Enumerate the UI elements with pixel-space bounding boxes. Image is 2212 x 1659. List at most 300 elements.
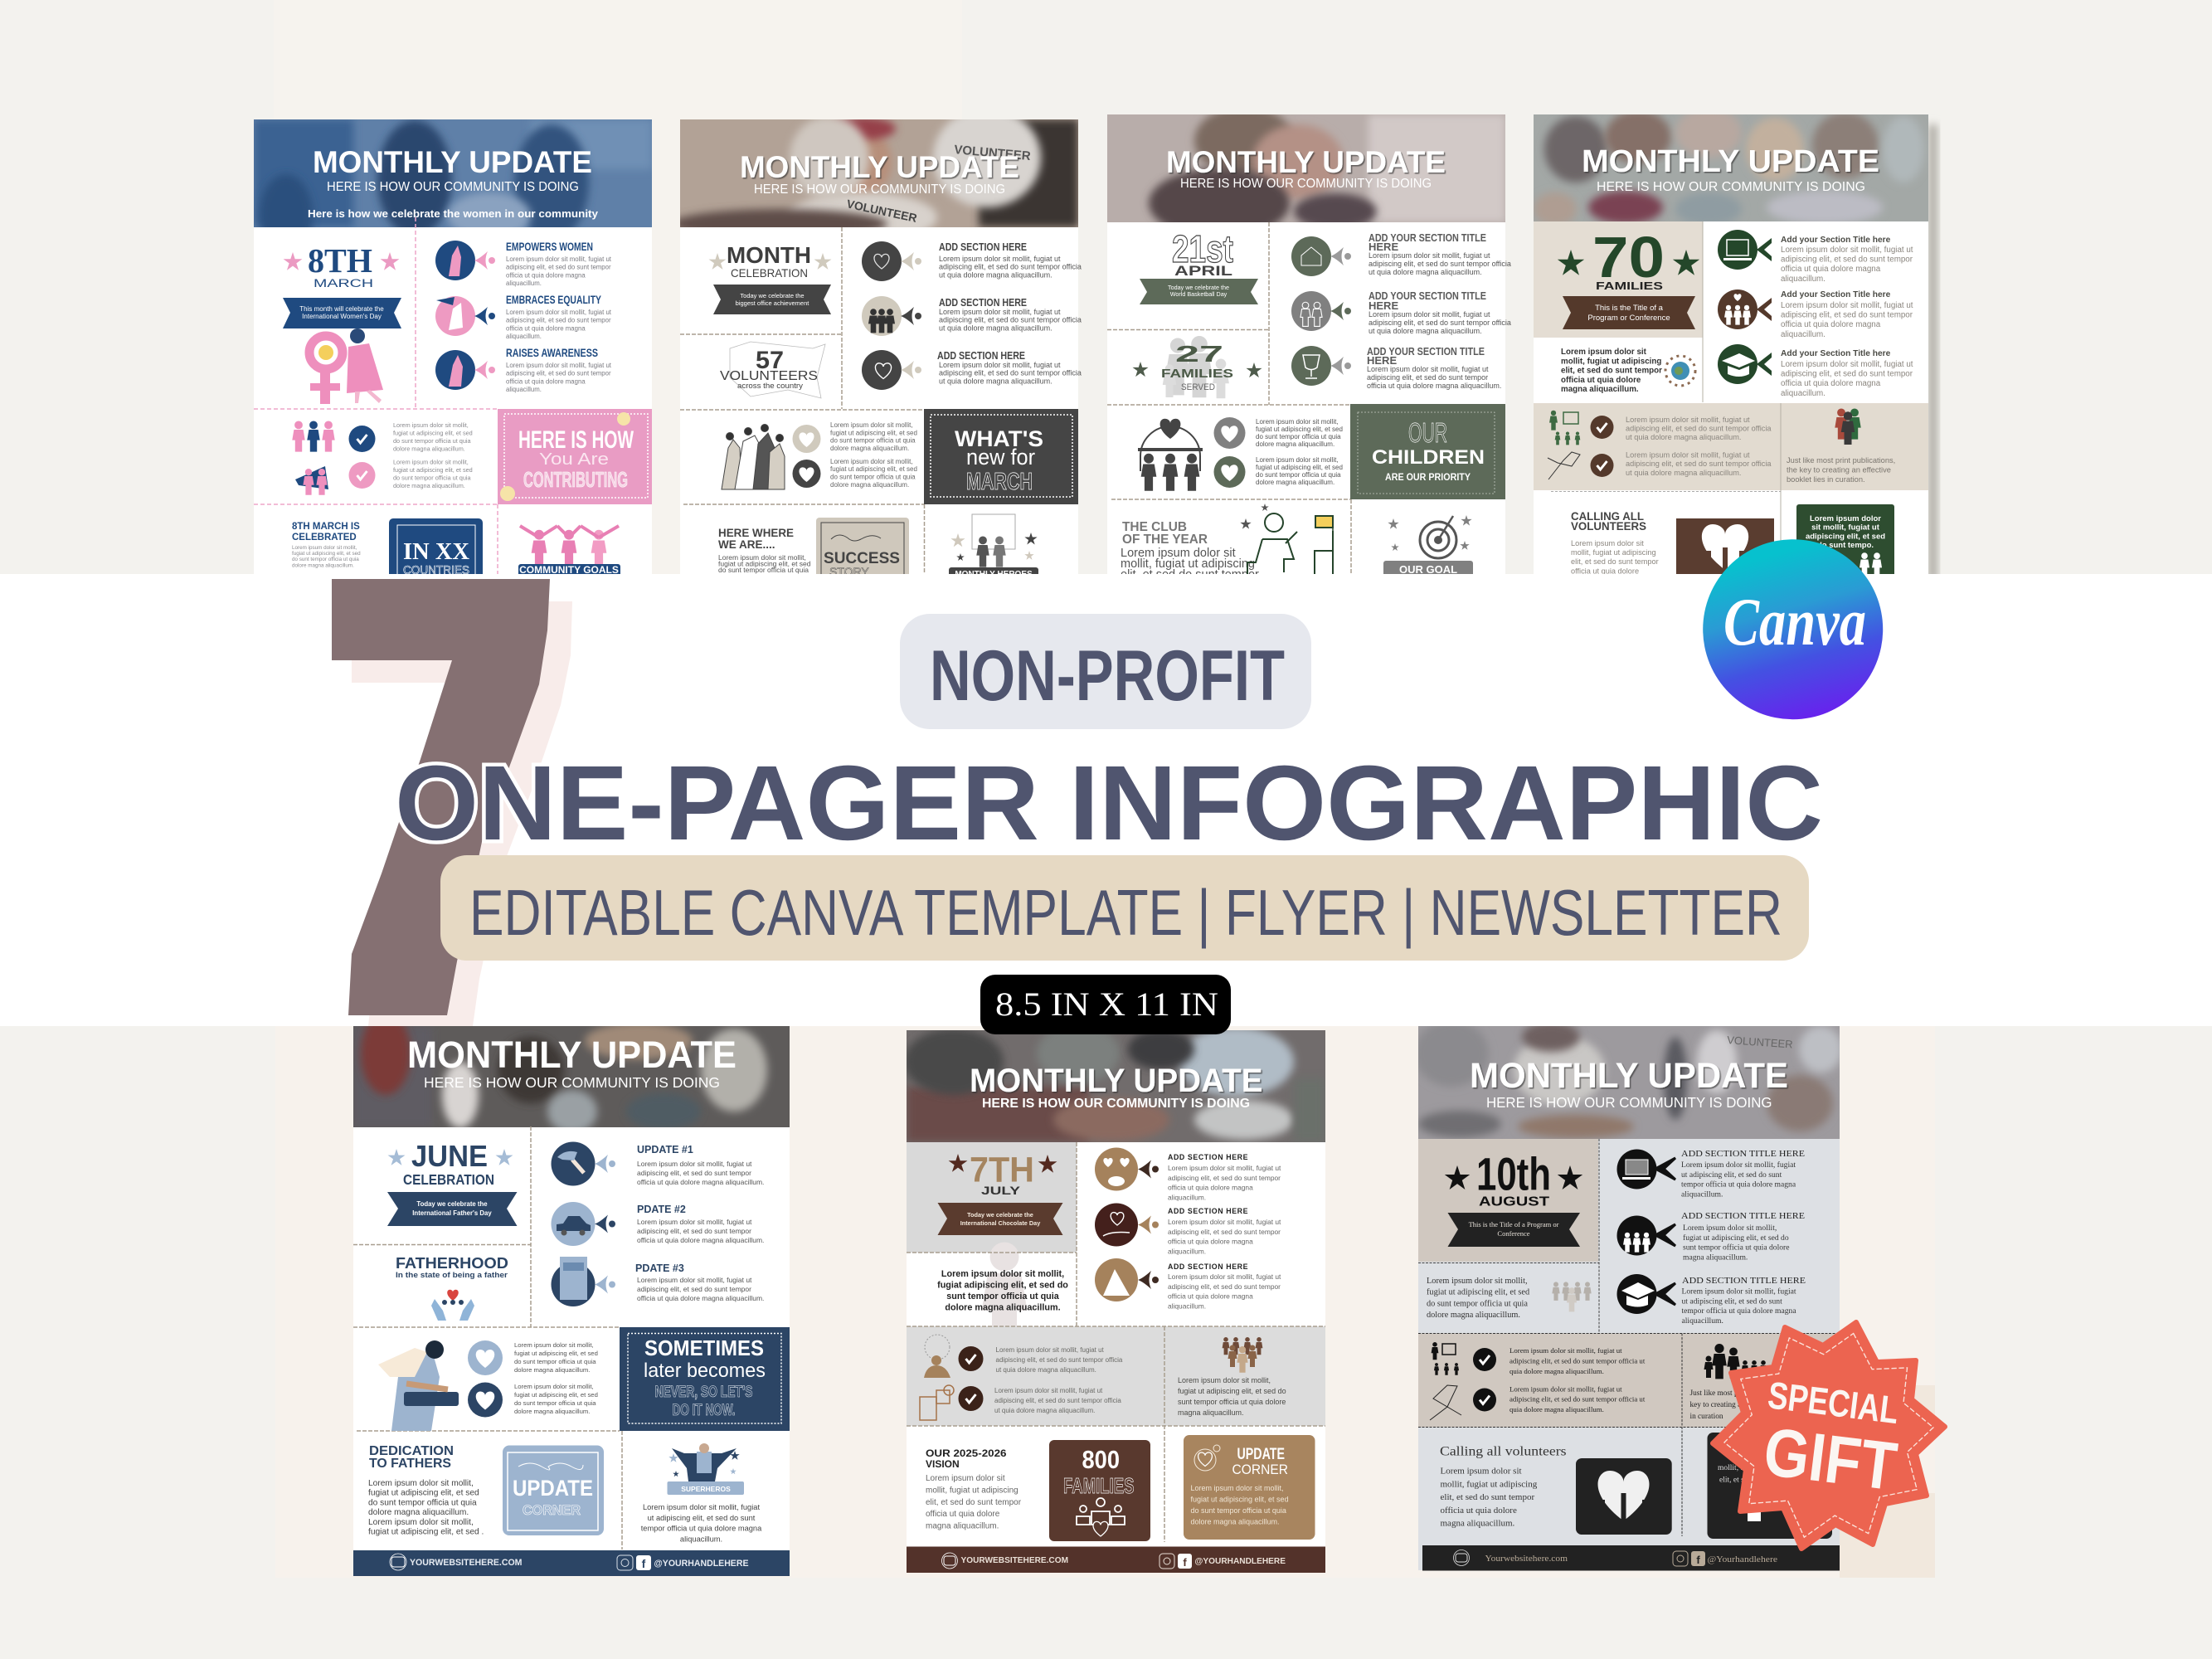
update 3: officia ut quia dolore magna aliquacillum.	[637, 1294, 764, 1302]
text block: fugiat ut adipiscing elit, et sed	[1427, 1288, 1530, 1297]
box: update corner: do sunt tempor officia ut quia	[1191, 1506, 1286, 1515]
section 3: adipiscing elit, et sed do sunt tempor	[1168, 1282, 1281, 1291]
illustration: superheroes: SUPERHEROS	[681, 1485, 731, 1493]
text block: dolore magna aliquacillum.	[1427, 1311, 1520, 1320]
fatherhood: FATHERHOOD	[396, 1255, 508, 1272]
body text: adipiscing elit, et sed do sunt tempor officia	[1626, 425, 1772, 433]
section 1: aliquacillum.	[1168, 1193, 1206, 1201]
callout: in xx countries: IN XX	[403, 539, 469, 565]
header photo	[1534, 108, 1928, 226]
dividers	[907, 1142, 1325, 1542]
bold text: dolore magna aliquacillum.	[945, 1302, 1061, 1312]
section: celebrated: Lorem ipsum dolor sit mollit,	[292, 545, 357, 551]
body text: Lorem ipsum dolor sit mollit,	[1256, 418, 1339, 426]
text: magna aliquacillum.	[1178, 1408, 1244, 1417]
text block: Lorem ipsum dolor sit mollit,	[1427, 1277, 1528, 1286]
icon: caring hands	[431, 1290, 474, 1321]
text: Lorem ipsum dolor sit mollit, fugiat	[643, 1503, 760, 1511]
grey box: date: 7TH	[970, 1150, 1034, 1190]
box: hands heart	[1676, 518, 1774, 585]
section: club of the year: elit, et sed do sunt tempor	[1121, 568, 1259, 581]
section 2: aliquacillum.	[1168, 1247, 1206, 1255]
section: dedication: Lorem ipsum dolor sit mollit,	[368, 1479, 474, 1488]
icon: crowd	[1223, 1337, 1262, 1373]
icon 3	[1718, 344, 1772, 384]
ribbon: Today we celebrate the	[967, 1211, 1033, 1219]
box: green callout	[1796, 504, 1894, 584]
section 1: HERE	[1369, 241, 1398, 253]
section 3: Lorem ipsum dolor sit mollit, fugiat ut	[1781, 360, 1913, 369]
icon 3	[1291, 346, 1351, 386]
ribbon: Today we celebrate the	[1168, 284, 1229, 291]
section: raises awareness	[506, 346, 612, 393]
section: empowers women: aliquacillum.	[506, 280, 542, 287]
body text: do sunt tempor officia ut quia	[393, 437, 472, 445]
update 1: adipiscing elit, et sed do sunt tempor	[637, 1169, 751, 1177]
check badges	[348, 426, 375, 489]
callout: sometimes	[620, 1327, 790, 1431]
section: dedication: fugiat ut adipiscing elit, et sed	[368, 1489, 479, 1498]
body text: fugiat ut adipiscing elit, et sed	[830, 465, 917, 473]
section: celebrated: fugiat ut adipiscing elit, et sed	[292, 551, 361, 557]
panel: brown chocolate day newsletter	[904, 1024, 1325, 1573]
pill: non-profit	[900, 614, 1311, 729]
icon 2	[1617, 1216, 1675, 1256]
dashed line	[1551, 491, 1781, 493]
body text: Lorem ipsum dolor sit mollit,	[393, 458, 469, 466]
section 3: adipiscing elit, et sed do sunt tempor	[1781, 370, 1913, 379]
section 1: adipiscing elit, et sed do sunt tempor officia	[939, 263, 1082, 271]
section 2: adipiscing elit, et sed do sunt tempor officia	[1369, 319, 1511, 327]
panel: monochrome volunteer newsletter	[672, 108, 1082, 584]
body text: quia dolore magna aliquacillum.	[1510, 1405, 1604, 1413]
illustration: cheering group	[1835, 408, 1861, 445]
date: month celebration	[709, 242, 831, 280]
callout: our children: OUR	[1408, 417, 1447, 448]
section 3	[1682, 1277, 1806, 1326]
canva logo: Canva	[1723, 584, 1866, 659]
section 3: adipiscing elit, et sed do sunt tempor officia	[939, 369, 1082, 377]
fatherhood: In the state of being a father	[396, 1271, 508, 1279]
date: 8TH March: 8TH	[308, 241, 372, 280]
section 2: Lorem ipsum dolor sit mollit, fugiat ut	[1781, 301, 1913, 310]
footer	[353, 1550, 790, 1576]
badge: special gift: GIFT	[1760, 1414, 1901, 1505]
ribbon: World Basketball Day	[1170, 290, 1228, 298]
body text: dolore magna aliquacillum.	[514, 1408, 590, 1415]
section: club of the year: mollit, fugiat ut adipiscing	[1121, 557, 1255, 571]
section: calling all volunteers	[1440, 1445, 1566, 1529]
section: here where we are: WE ARE....	[718, 538, 775, 551]
box: green callout: adipiscing elit, et sed	[1806, 532, 1885, 541]
header title: MONTHLY UPDATE	[1582, 144, 1879, 179]
date: 8TH March	[284, 241, 399, 289]
update 3	[635, 1262, 764, 1302]
date: 70 families	[1534, 221, 1703, 338]
section 3	[1168, 1262, 1281, 1310]
text: the key to creating an effective	[1787, 466, 1891, 474]
section: dedication: Lorem ipsum dolor sit mollit,	[368, 1518, 474, 1527]
section: empowers women: EMPOWERS WOMEN	[506, 240, 593, 253]
section: here where we are: do sunt tempor officia ut quia	[718, 566, 809, 574]
illustration: superheroes	[667, 1443, 744, 1495]
footer: f	[1696, 1554, 1700, 1566]
text: ut adipiscing elit, et sed do sunt	[648, 1514, 756, 1522]
icon: globe	[1665, 356, 1695, 386]
section 2: aliquacillum.	[1781, 330, 1826, 339]
section: celebrated: 8TH MARCH IS	[292, 522, 360, 532]
date: 21st April: 21st	[1172, 227, 1233, 270]
panel: green children newsletter	[1107, 106, 1511, 584]
body text: fugiat ut adipiscing elit, et sed	[514, 1350, 598, 1357]
callout: update corner: UPDATE	[513, 1476, 593, 1501]
ribbon	[937, 1203, 1063, 1235]
band: middle row	[1534, 403, 1928, 574]
dividers	[680, 227, 924, 574]
check badges	[1591, 416, 1614, 477]
section: vision: OUR 2025-2026	[926, 1447, 1007, 1459]
icon 3	[862, 350, 921, 390]
section: vision: VISION	[926, 1458, 960, 1470]
bold text: sunt tempor officia ut quia	[946, 1292, 1060, 1301]
grey box: date	[907, 1142, 1077, 1253]
icon: presenter	[1549, 411, 1580, 445]
band: middle row	[1418, 1334, 1840, 1536]
update 1: UPDATE #1	[637, 1144, 693, 1155]
icon: hammer	[551, 1141, 615, 1186]
section 3: ut quia dolore magna aliquacillum.	[939, 377, 1053, 385]
section: vision: elit, et sed do sunt tempor	[926, 1498, 1022, 1507]
ribbon: This is the Title of a	[1595, 304, 1664, 313]
body text: do sunt tempor officia ut quia	[514, 1399, 596, 1407]
body text: fugiat ut adipiscing elit, et sed	[514, 1391, 598, 1399]
callout: what's new: MARCH	[966, 469, 1033, 495]
icon 2	[1291, 291, 1351, 331]
numeral 7	[332, 579, 550, 1015]
fatherhood	[396, 1255, 508, 1279]
section: empowers women: officia ut quia dolore magna	[506, 271, 586, 279]
section 2: officia ut quia dolore magna	[1168, 1238, 1253, 1246]
section: club of the year: OF THE YEAR	[1122, 533, 1208, 547]
section 2: Lorem ipsum dolor sit mollit, fugiat ut	[1369, 310, 1490, 319]
header photo	[254, 119, 652, 227]
section 3: adipiscing elit, et sed do sunt tempor	[1367, 373, 1488, 382]
section 3: ADD YOUR SECTION TITLE	[1367, 345, 1485, 358]
header photo	[1414, 1020, 1842, 1139]
callout: success story	[816, 518, 909, 584]
callout: update corner	[503, 1445, 604, 1535]
stat: 27 families: 27	[1175, 341, 1223, 367]
footer: YOURWEBSITEHERE.COM	[960, 1555, 1068, 1565]
section: embraces equality: aliquacillum.	[506, 333, 542, 340]
section 3	[937, 349, 1082, 385]
panel: fathers day newsletter	[353, 1012, 790, 1576]
section 2: ADD SECTION HERE	[939, 296, 1027, 309]
header subtitle: HERE IS HOW OUR COMMUNITY IS DOING	[327, 180, 579, 194]
body text: Lorem ipsum dolor sit mollit,	[830, 458, 913, 465]
icon: car	[551, 1202, 615, 1246]
body text: do sunt tempor officia ut quia	[1256, 471, 1341, 479]
box: update corner: UPDATE	[1237, 1446, 1285, 1463]
numeral 7 shadow	[352, 601, 572, 1026]
header title: MONTHLY UPDATE	[970, 1063, 1262, 1099]
box: hands heart	[1576, 1458, 1672, 1535]
box: update corner: fugiat ut adipiscing elit, et sed	[1191, 1495, 1289, 1503]
section 1	[1168, 1153, 1281, 1201]
bold text	[937, 1243, 1068, 1352]
stat: 57 volunteers	[720, 342, 825, 398]
header photo: VOLUNTEER	[845, 197, 918, 225]
section 1: aliquacillum.	[1681, 1190, 1723, 1199]
date: month celebration: MONTH	[727, 242, 811, 268]
section 3: Lorem ipsum dolor sit mollit, fugiat ut	[1168, 1272, 1281, 1281]
section 1: ut quia dolore magna aliquacillum.	[939, 270, 1053, 279]
section 3: aliquacillum.	[1781, 389, 1826, 398]
icon 1	[1291, 236, 1351, 276]
section: embraces equality: Lorem ipsum dolor sit mollit, fugiat ut	[506, 309, 612, 316]
section: calling all volunteers: officia ut quia dolore	[1440, 1506, 1517, 1515]
body text: Lorem ipsum dolor sit mollit,	[830, 421, 913, 429]
section: calling all volunteers: Lorem ipsum dolor sit	[1440, 1467, 1522, 1477]
grey box: date: JULY	[981, 1184, 1021, 1197]
illustration: high five group	[722, 425, 785, 489]
ribbon: Conference	[1497, 1229, 1530, 1238]
body text: ut quia dolore magna aliquacillum.	[995, 1366, 1096, 1374]
illustration: carpenter	[378, 1340, 459, 1431]
section 1: Lorem ipsum dolor sit mollit, fugiat ut	[939, 255, 1061, 263]
illustration: woman with female symbol	[309, 328, 383, 404]
body text: Lorem ipsum dolor sit mollit,	[393, 421, 469, 429]
body text: fugiat ut adipiscing elit, et sed	[1256, 464, 1343, 471]
stat: 27 families: SERVED	[1181, 382, 1215, 392]
body text: quia dolore magna aliquacillum.	[1510, 1367, 1604, 1375]
callout: here is how: HERE IS HOW	[518, 426, 634, 454]
section 2	[1369, 289, 1511, 335]
ribbon	[1448, 1213, 1580, 1247]
section 2	[1168, 1207, 1281, 1255]
header subtitle: HERE IS HOW OUR COMMUNITY IS DOING	[1180, 177, 1432, 191]
date: 70 families: 70	[1592, 225, 1665, 289]
section: club of the year	[1121, 520, 1259, 581]
section: calling all volunteers: VOLUNTEERS	[1571, 520, 1646, 533]
text: booklet lies in curation.	[1787, 475, 1865, 484]
panel: grey august newsletter	[1414, 1020, 1842, 1571]
section 1: officia ut quia dolore magna	[1168, 1184, 1253, 1192]
body text: adipiscing elit, et sed do sunt tempor officia ut	[1510, 1395, 1646, 1404]
pill: subtitle: EDITABLE CANVA TEMPLATE | FLYER | NEWSLETTER	[469, 876, 1782, 949]
section: calling all volunteers: mollit, fugiat ut adipiscing	[1571, 548, 1656, 557]
update 3: Lorem ipsum dolor sit mollit, fugiat ut	[637, 1276, 752, 1284]
section: here where we are: HERE WHERE	[718, 527, 794, 539]
date: June: JUNE	[411, 1139, 488, 1173]
header photo: VOLUNTEER	[1727, 1034, 1793, 1051]
date: 8TH March: MARCH	[314, 277, 373, 289]
text block: elit, et sed do sunt tempor	[1561, 367, 1662, 376]
date: 10th August: 10th	[1476, 1148, 1551, 1199]
update 2: Lorem ipsum dolor sit mollit, fugiat ut	[637, 1218, 752, 1226]
check badges	[1473, 1348, 1496, 1412]
section 2: ut quia dolore magna aliquacillum.	[1369, 327, 1482, 335]
section 1: ut quia dolore magna aliquacillum.	[1369, 268, 1482, 276]
icon: person with thoughts	[924, 1335, 950, 1378]
header title: MONTHLY UPDATE	[1166, 145, 1446, 179]
section: embraces equality	[506, 293, 612, 340]
section 2: fugiat ut adipiscing elit, et sed do	[1683, 1233, 1789, 1243]
callout: what's new	[924, 409, 1078, 504]
section: celebrated: CELEBRATED	[292, 533, 357, 542]
callout: success story: SUCCESS	[824, 550, 900, 567]
footer: Yourwebsitehere.com	[1485, 1554, 1568, 1564]
section: empowers women: adipiscing elit, et sed do sunt tempor	[506, 264, 611, 271]
update 1	[637, 1144, 764, 1186]
section 2	[939, 296, 1082, 332]
header subtitle: HERE IS HOW OUR COMMUNITY IS DOING	[1597, 180, 1865, 194]
section 1: ADD SECTION TITLE HERE	[1681, 1150, 1805, 1159]
text: sunt tempor officia ut quia dolore	[1178, 1398, 1286, 1406]
body text: Lorem ipsum dolor sit mollit, fugiat ut	[994, 1387, 1103, 1394]
box: update corner: Lorem ipsum dolor sit mollit,	[1191, 1484, 1284, 1492]
header tagline: Here is how we celebrate the women in our community	[308, 207, 599, 220]
date: month celebration: CELEBRATION	[731, 266, 808, 280]
header subtitle: HERE IS HOW OUR COMMUNITY IS DOING	[1486, 1094, 1772, 1111]
section 2	[1681, 1212, 1805, 1262]
paper texture top	[274, 0, 962, 574]
icon: bag	[551, 1257, 615, 1306]
icon 2	[1718, 289, 1772, 329]
body text: fugiat ut adipiscing elit, et sed	[1256, 426, 1343, 433]
icon: handshake	[1548, 452, 1580, 479]
icon: puzzle	[920, 1385, 954, 1420]
date: 70 families: FAMILIES	[1596, 280, 1663, 292]
section 3: ADD SECTION TITLE HERE	[1682, 1277, 1806, 1286]
callout: sometimes: later becomes	[644, 1360, 766, 1382]
bold text: fugiat adipiscing elit, et sed do	[937, 1281, 1068, 1291]
dividers	[254, 217, 498, 574]
header title: MONTHLY UPDATE	[313, 145, 592, 179]
callout: in xx countries: COUNTRIES	[403, 563, 469, 577]
section 1: adipiscing elit, et sed do sunt tempor	[1781, 255, 1913, 265]
text block: Lorem ipsum dolor sit	[1561, 348, 1647, 357]
callout: our children	[1350, 404, 1505, 499]
section 2	[1781, 290, 1913, 339]
section 3: aliquacillum.	[1168, 1301, 1206, 1310]
section 1: ADD YOUR SECTION TITLE	[1369, 231, 1486, 244]
section 1	[1681, 1150, 1805, 1199]
section: calling all volunteers: Calling all volunteers	[1440, 1445, 1566, 1458]
pill: size: 8.5 IN X 11 IN	[995, 985, 1218, 1023]
footer: @YOURHANDLEHERE	[654, 1559, 748, 1569]
header title: MONTHLY UPDATE	[1470, 1056, 1788, 1096]
ribbon: International Chocolate Day	[960, 1219, 1041, 1227]
body text: dolore magna aliquacillum.	[830, 445, 909, 452]
section 1: adipiscing elit, et sed do sunt tempor officia	[1369, 260, 1511, 268]
dividers	[1107, 222, 1351, 574]
section 3: officia ut quia dolore magna	[1781, 379, 1881, 388]
section: calling all volunteers: Lorem ipsum dolor sit	[1571, 539, 1644, 547]
body text: do sunt tempor officia ut quia	[393, 474, 472, 481]
section: calling all volunteers: officia ut quia dolore	[1571, 567, 1639, 575]
body text: Lorem ipsum dolor sit mollit, fugiat ut	[1626, 416, 1750, 424]
date: June: CELEBRATION	[403, 1171, 494, 1188]
section 2: magna aliquacillum.	[1683, 1253, 1748, 1262]
box: dark callout	[1707, 1433, 1832, 1539]
ribbon: This is the Title of a Program or	[1469, 1220, 1559, 1228]
body text: Lorem ipsum dolor sit mollit, fugiat ut	[1626, 451, 1750, 460]
stat: 27 families: FAMILIES	[1161, 367, 1233, 381]
section 1: Lorem ipsum dolor sit mollit, fugiat ut	[1168, 1164, 1281, 1172]
callout: update corner: CORNER	[523, 1502, 581, 1518]
section: empowers women: Lorem ipsum dolor sit mollit, fugiat ut	[506, 255, 612, 263]
section 3: ADD SECTION HERE	[937, 349, 1025, 362]
icon 3	[1617, 1274, 1675, 1314]
update 1: officia ut quia dolore magna aliquacillum.	[637, 1178, 764, 1186]
pill: non-profit: NON-PROFIT	[930, 636, 1285, 716]
stat: 27 families	[1132, 336, 1262, 398]
icon: handshake	[1430, 1385, 1461, 1420]
update 2	[637, 1204, 764, 1244]
section 1: aliquacillum.	[1781, 275, 1826, 284]
icon: dome of families	[1138, 419, 1203, 491]
box: 800 families: FAMILIES	[1063, 1473, 1135, 1498]
body text: Lorem ipsum dolor sit mollit, fugiat ut	[1510, 1346, 1622, 1355]
date: 10th August: AUGUST	[1479, 1194, 1550, 1209]
section: dedication: fugiat ut adipiscing elit, et sed .	[368, 1528, 484, 1536]
section: calling all volunteers: elit, et sed do sunt tempor	[1571, 557, 1659, 566]
ribbon: International Women's Day	[302, 313, 382, 320]
section 2: ut quia dolore magna aliquacillum.	[939, 324, 1053, 332]
header photo	[1107, 114, 1505, 222]
section: dedication: DEDICATION	[369, 1444, 454, 1458]
callout: sometimes: SOMETIMES	[644, 1335, 764, 1360]
section: celebrated: dolore magna aliquacillum.	[292, 562, 354, 568]
ribbon	[283, 298, 401, 328]
text: aliquacillum.	[680, 1535, 722, 1543]
text block: magna aliquacillum.	[1561, 385, 1639, 394]
header subtitle: HERE IS HOW OUR COMMUNITY IS DOING	[424, 1074, 720, 1091]
illustration: goal climber	[1240, 504, 1333, 574]
section: dedication	[368, 1444, 484, 1536]
box: 800 families: 800	[1082, 1445, 1120, 1474]
section 3	[1781, 349, 1913, 398]
callout: here is how	[498, 409, 652, 504]
divider	[1702, 221, 1704, 402]
box: update corner	[1184, 1435, 1315, 1540]
section 3: Lorem ipsum dolor sit mollit, fugiat	[1682, 1287, 1796, 1296]
section 1: Add your Section Title here	[1781, 236, 1891, 245]
footer	[1422, 1545, 1840, 1571]
box: update corner: dolore magna aliquacillum.	[1191, 1518, 1280, 1526]
ribbon: Program or Conference	[1587, 314, 1670, 323]
family silhouette	[1704, 1344, 1767, 1379]
section 2: Lorem ipsum dolor sit mollit, fugiat ut	[1168, 1218, 1281, 1226]
callout: here is how: You Are	[539, 450, 609, 469]
stat: 57 volunteers: VOLUNTEERS	[720, 369, 818, 383]
header title: MONTHLY UPDATE	[407, 1034, 737, 1076]
update 1: Lorem ipsum dolor sit mollit, fugiat ut	[637, 1160, 752, 1168]
section: celebrated: do sunt tempor officia ut quia	[292, 557, 359, 562]
ribbon	[1140, 279, 1258, 304]
body text: do sunt tempor officia ut quia	[830, 473, 916, 481]
text: key to creating an effective booklet lies	[1690, 1400, 1811, 1409]
section 2: Add your Section Title here	[1781, 290, 1891, 299]
date: 10th August	[1418, 1139, 1598, 1262]
panel: women's day newsletter	[254, 119, 652, 585]
main title: ONE-PAGER INFOGRAPHIC	[395, 744, 1823, 863]
box: green callout: do sunt tempo.	[1817, 541, 1874, 550]
icon 3	[1095, 1258, 1159, 1301]
date: 21st April: APRIL	[1174, 263, 1232, 279]
section: calling all volunteers: CALLING ALL	[1571, 510, 1644, 523]
